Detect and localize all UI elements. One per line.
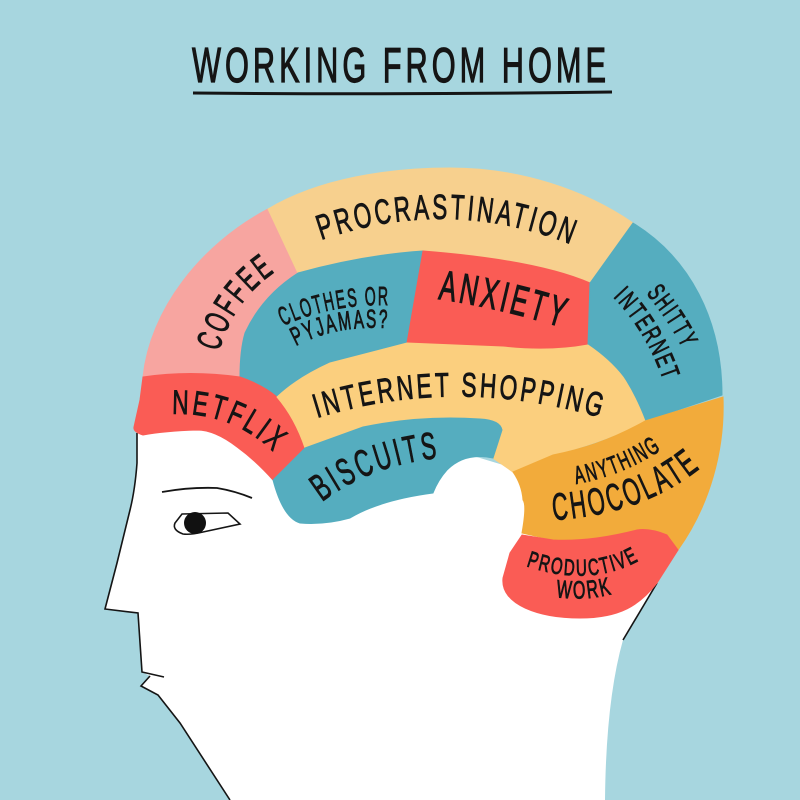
face: eyebrow and eye — [162, 488, 252, 534]
region: anything chocolate: ANYTHING — [576, 437, 659, 484]
region: biscuits: BISCUITS — [308, 432, 436, 502]
region: anything chocolate: CHOCOLATE — [552, 448, 700, 520]
region: procrastination: PROCRASTINATION — [315, 194, 578, 244]
pupil — [184, 512, 206, 534]
region: anything chocolate — [512, 396, 724, 551]
region: internet shopping: INTERNET SHOPPING — [312, 372, 603, 418]
region: internet shopping — [276, 342, 646, 472]
region: shitty internet — [588, 222, 722, 420]
region: netflix — [133, 373, 304, 481]
region: shitty internet: SHITTY — [648, 284, 699, 344]
region: shitty internet: INTERNET — [614, 285, 680, 376]
region: anxiety: ANXIETY — [437, 270, 570, 326]
head silhouette — [105, 425, 678, 800]
region: coffee: COFFEE — [198, 253, 274, 348]
region: netflix: NETFLIX — [174, 390, 289, 452]
region: anxiety — [406, 250, 590, 349]
region: productive work: WORK — [557, 577, 612, 600]
region: productive work — [502, 529, 678, 618]
brain regions — [133, 168, 724, 618]
region: clothes or pyjamas — [240, 250, 423, 396]
region: productive work: PRODUCTIVE — [526, 546, 638, 576]
region: coffee — [142, 208, 298, 376]
region: clothes or pyjamas: CLOTHES OR — [278, 286, 388, 325]
eye — [174, 513, 240, 534]
eyebrow — [162, 488, 252, 498]
region: procrastination — [268, 168, 634, 282]
region: clothes or pyjamas: PYJAMAS? — [288, 309, 388, 346]
region: biscuits — [272, 418, 502, 524]
